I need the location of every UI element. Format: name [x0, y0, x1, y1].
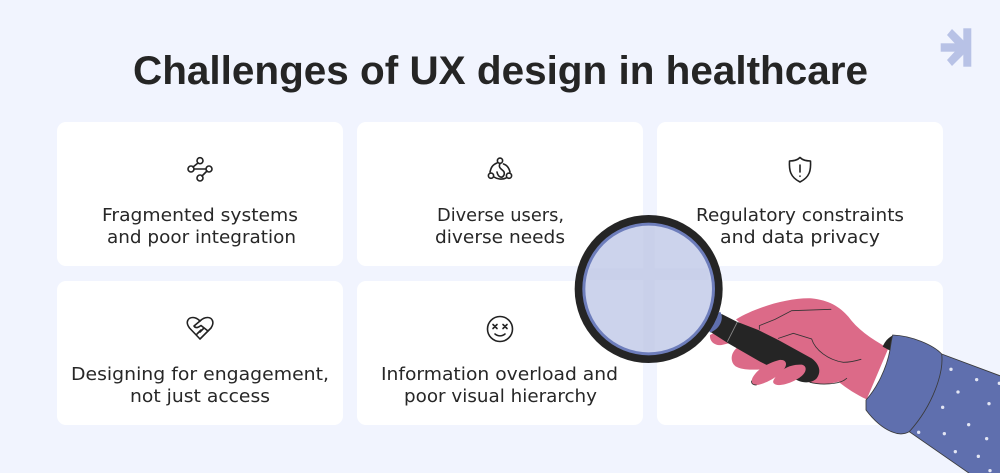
text: fragmented systems: Fragmented systems — [102, 206, 298, 226]
handle collar — [707, 312, 722, 333]
lens card-gap shadow — [589, 227, 709, 351]
cuff inner shadow — [883, 335, 893, 351]
palm — [736, 298, 888, 399]
handle highlight — [727, 322, 737, 342]
text: information overload — [381, 365, 618, 407]
text: fragmented systems: and poor integration — [107, 228, 296, 248]
icon: heart handshake — [187, 318, 213, 339]
panel: regulatory constraints — [657, 122, 943, 266]
sleeve dots — [917, 368, 1000, 472]
text: fragmented systems — [102, 206, 298, 248]
panel: information overload — [357, 281, 643, 425]
index fingertip — [710, 330, 732, 345]
icon: diverse users cycle — [488, 158, 512, 179]
panel: diverse users — [357, 122, 643, 266]
text: information overload: Information overload and — [381, 365, 618, 385]
ring finger — [752, 360, 786, 385]
sleeve arm — [909, 354, 1000, 473]
text: regulatory constraints: and data privacy — [720, 228, 880, 248]
cuff — [866, 335, 942, 434]
text: diverse users — [435, 206, 565, 248]
icon: dizzy face — [488, 316, 512, 342]
text: regulatory constraints: Regulatory constraints — [696, 206, 904, 226]
text: information overload: poor visual hierarchy — [404, 387, 597, 407]
text: regulatory constraints — [696, 206, 904, 248]
text: diverse users: Diverse users, — [437, 206, 564, 226]
sleeve — [866, 335, 1000, 473]
text: designing for engagement — [71, 365, 329, 407]
hand and handle — [710, 298, 888, 399]
panel: fragmented systems — [57, 122, 343, 266]
text: designing for engagement: Designing for engagement, — [71, 365, 329, 385]
title: Challenges of UX design in healthcare — [133, 49, 868, 93]
handle — [710, 314, 819, 382]
logo arrow icon — [941, 28, 971, 67]
icon: shield with exclamation — [789, 158, 811, 182]
icon: connected nodes — [188, 158, 212, 181]
text: diverse users: diverse needs — [435, 228, 565, 248]
magnifier ring — [575, 215, 723, 363]
text: designing for engagement: not just access — [130, 387, 270, 407]
magnifier lens — [585, 226, 712, 352]
illustration: hand holding magnifying glass — [575, 215, 1000, 473]
magnifier rim — [582, 223, 715, 355]
little finger — [773, 365, 806, 385]
middle finger — [732, 347, 772, 370]
magnifying glass — [575, 215, 723, 363]
panel: designing for engagement — [57, 281, 343, 425]
hand creases — [759, 309, 861, 384]
panel: blank card — [657, 281, 943, 425]
